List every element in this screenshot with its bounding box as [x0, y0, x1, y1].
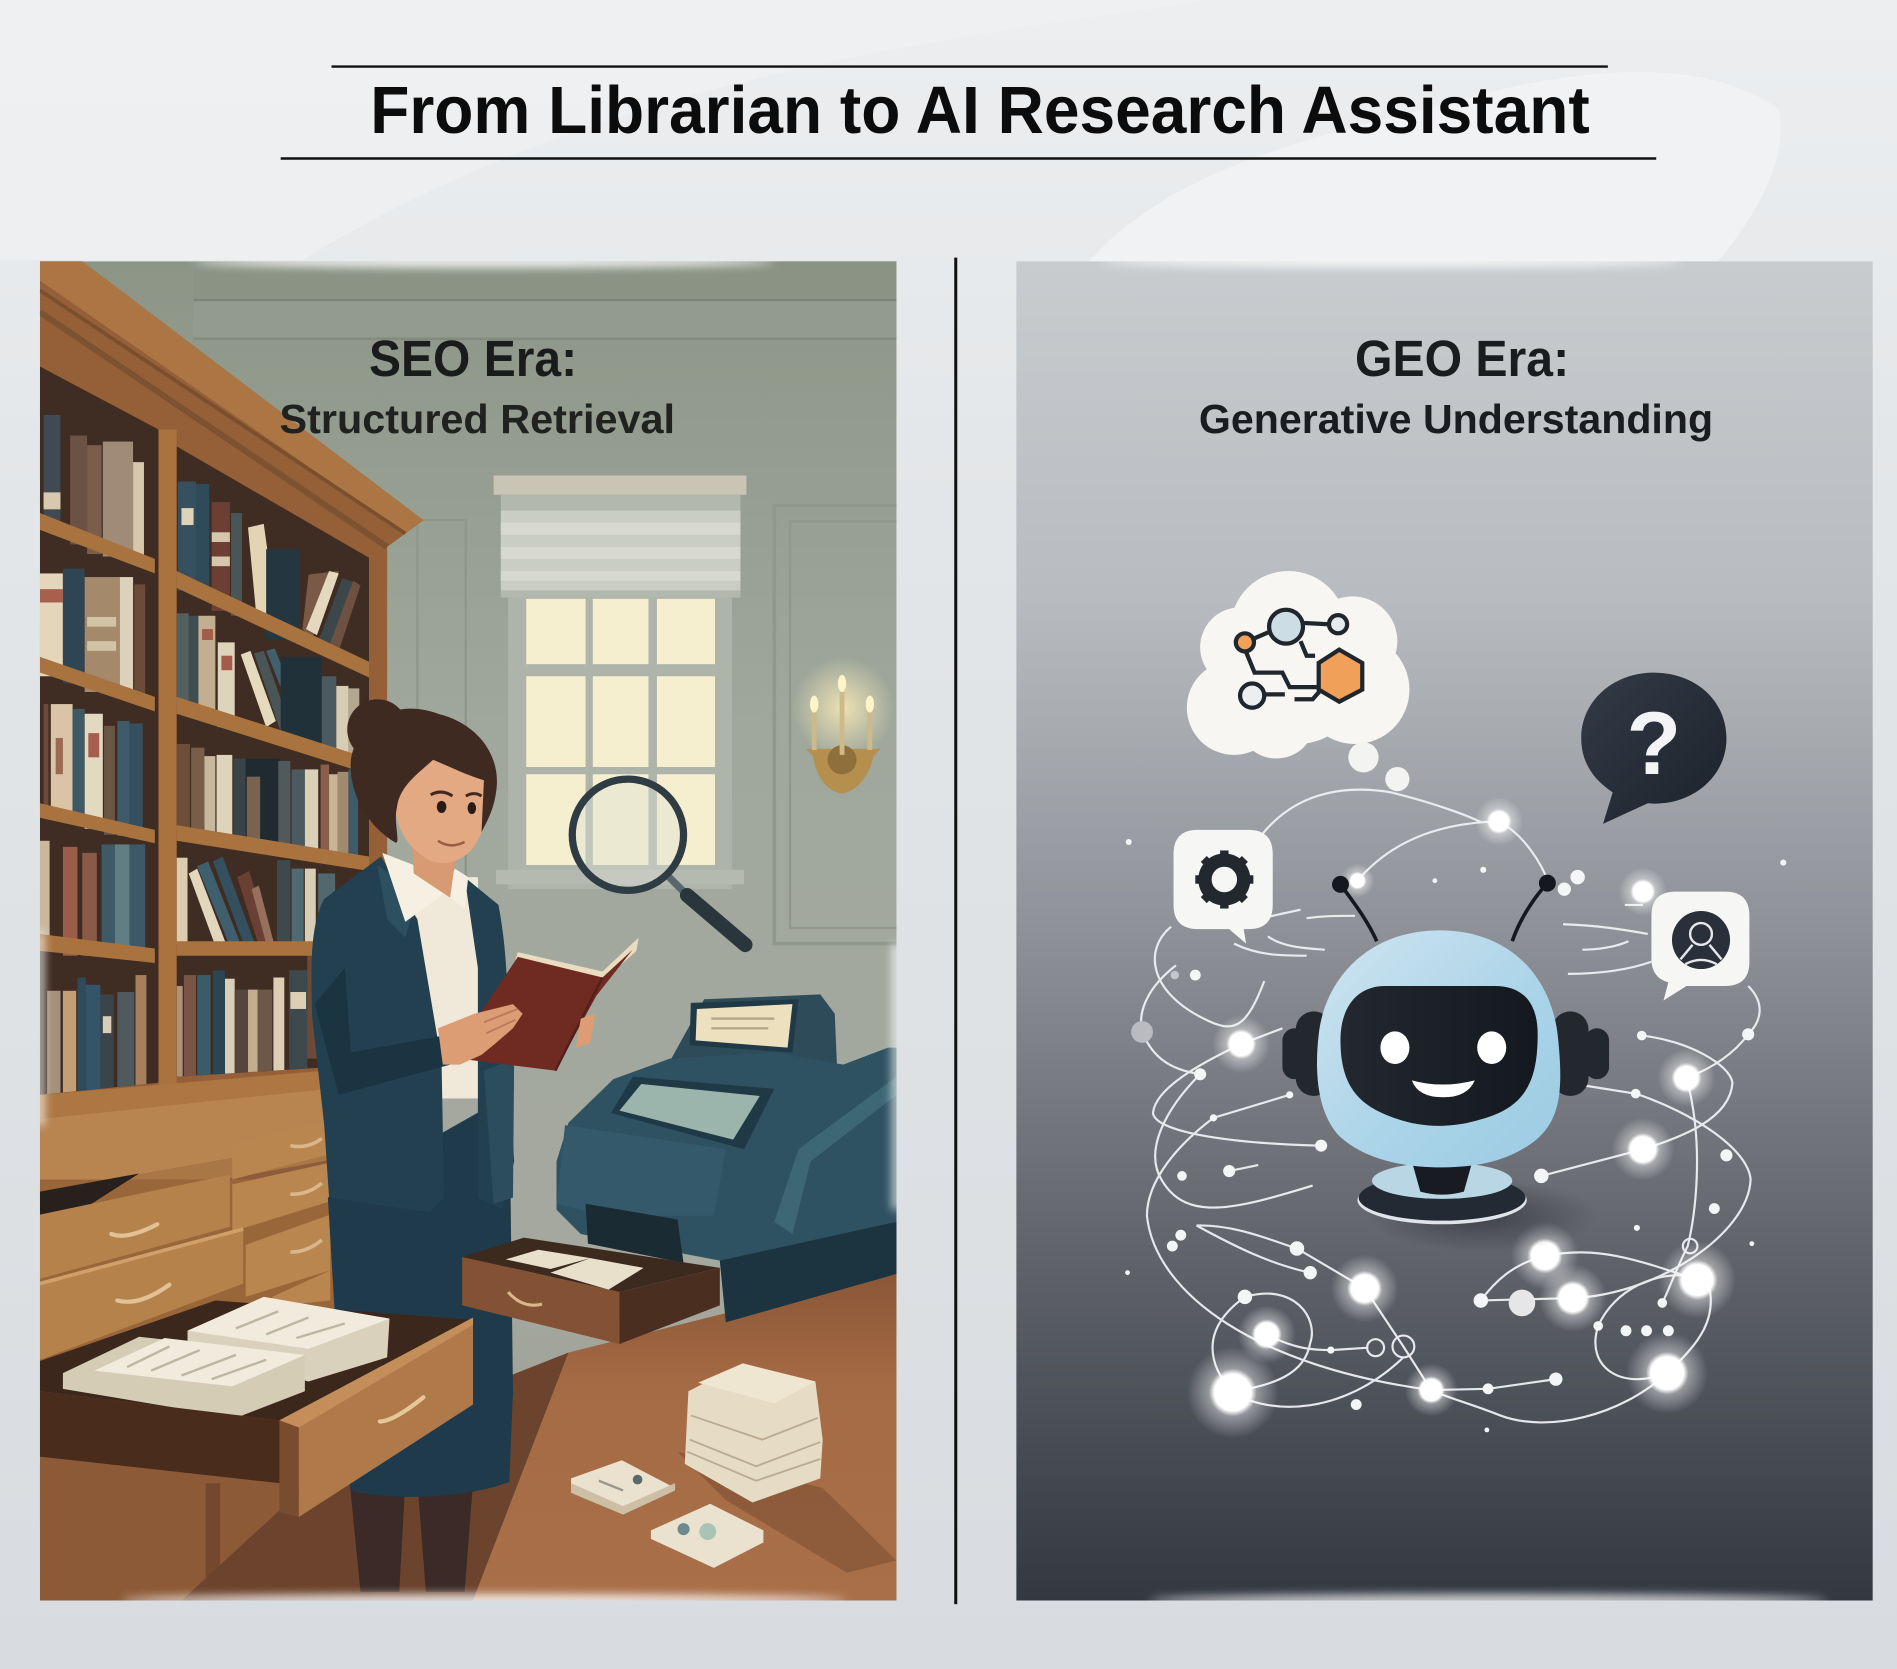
- network icon: [1236, 610, 1362, 708]
- SEO subheading: Structured Retrieval: [279, 396, 675, 442]
- legs: [350, 1482, 473, 1592]
- bookcase: [40, 261, 423, 1119]
- large open file drawer: [40, 1297, 473, 1517]
- SEO heading: SEO Era:: [369, 330, 577, 387]
- robot mascot: [1282, 876, 1609, 1252]
- antennas: [1334, 876, 1554, 941]
- face screen: [1340, 986, 1538, 1126]
- wall sconce: [798, 662, 888, 794]
- books column 2: [175, 481, 361, 1077]
- head and hair: [347, 699, 497, 898]
- eyes and smile: [1380, 1031, 1506, 1097]
- title: From Librarian to AI Research Assistant: [370, 74, 1590, 148]
- thought cloud with network icon: [1187, 571, 1409, 791]
- panel: GEO era AI assistant scene: [1016, 255, 1873, 1607]
- collar: [382, 853, 468, 922]
- thought dots: [1348, 742, 1409, 791]
- window: [494, 475, 746, 889]
- SEO heading: [279, 330, 675, 442]
- question speech bubble: ?: [1626, 693, 1681, 793]
- right panel edge glow: [1101, 255, 1827, 1607]
- hands: [438, 1004, 595, 1065]
- magnifying glass: [572, 779, 745, 945]
- catalog machine: [557, 994, 896, 1322]
- shelf boards: [40, 513, 387, 1119]
- GEO heading: [1199, 330, 1713, 442]
- books column 1: [40, 415, 146, 1100]
- cabinet and floor: [40, 1083, 896, 1603]
- center divider: [955, 258, 957, 1604]
- skirt: [328, 1095, 513, 1497]
- back wall: [40, 261, 907, 1601]
- ears: [1282, 1011, 1609, 1096]
- small file drawer: [462, 1238, 720, 1344]
- librarian figure: [311, 699, 639, 1592]
- shirt: [415, 877, 478, 1098]
- gear lightbulb card: [1174, 830, 1273, 944]
- network lines: [1141, 790, 1760, 1422]
- index card stack: [678, 1363, 896, 1573]
- question speech bubble: [1581, 673, 1726, 824]
- panel: SEO era librarian scene: [36, 255, 907, 1607]
- robot shadow: [1393, 1190, 1572, 1245]
- panel edge glow: [36, 255, 900, 1607]
- paper stacks: [63, 1297, 390, 1418]
- open book: [468, 938, 639, 1071]
- user profile card: [1651, 892, 1749, 1000]
- jacket: [311, 857, 514, 1212]
- head shell: [1317, 930, 1560, 1167]
- GEO subheading: Generative Understanding: [1199, 396, 1713, 442]
- loose index cards: [571, 1460, 763, 1568]
- GEO heading: GEO Era:: [1355, 330, 1569, 387]
- glowing nodes: [1125, 797, 1786, 1438]
- base: [1357, 1161, 1527, 1224]
